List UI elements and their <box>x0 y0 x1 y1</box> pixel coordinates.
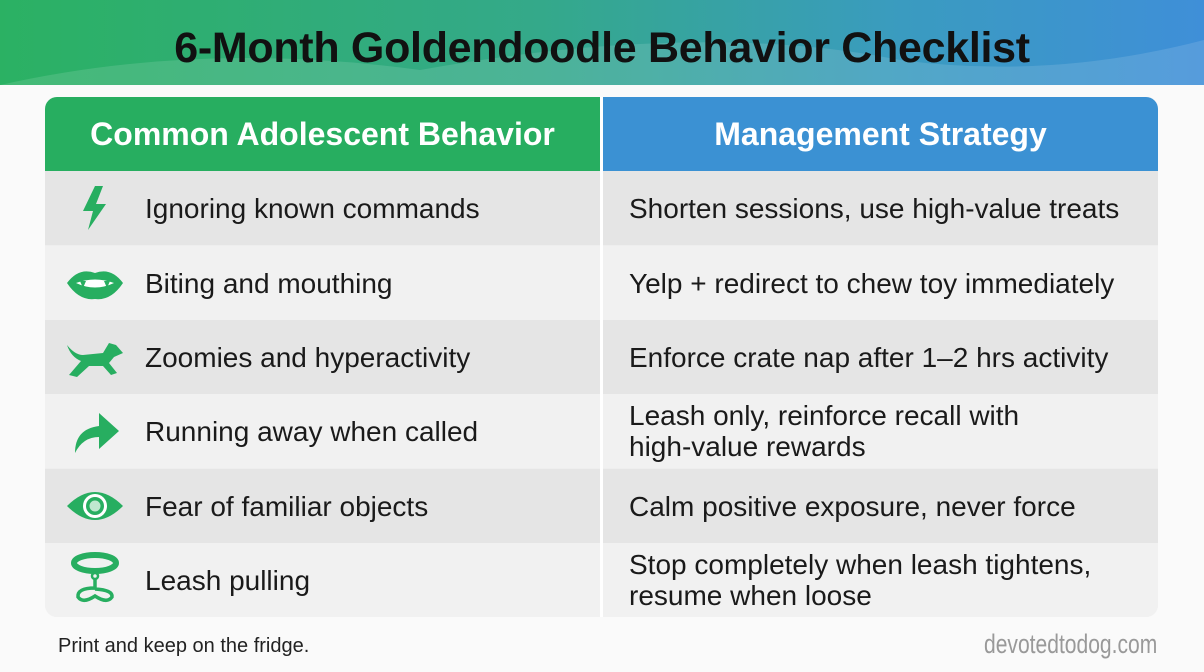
row 4: Running away when called <box>145 416 478 446</box>
row 6: Stop completely when leash tightens, <box>629 549 1091 580</box>
row 2 <box>45 246 1158 320</box>
icon: mouth <box>67 271 123 300</box>
icon: eye <box>67 492 123 520</box>
brand: devotedtodog.com <box>984 629 1157 659</box>
icon: collar and leash <box>71 552 119 602</box>
row 3 <box>45 320 1158 394</box>
row 5: Fear of familiar objects <box>145 490 428 522</box>
header: behavior: Common Adolescent Behavior <box>90 116 555 152</box>
row 4: high-value rewards <box>629 431 866 462</box>
row 1 <box>45 171 1158 245</box>
icon: arrow <box>75 413 119 453</box>
row 5 <box>45 469 1158 543</box>
row 2: Yelp + redirect to chew toy immediately <box>629 268 1114 298</box>
row 4: Leash only, reinforce recall with <box>629 400 1019 431</box>
row 2: Biting and mouthing <box>145 268 393 298</box>
table panel <box>45 97 1158 617</box>
footer note: Print and keep on the fridge. <box>58 635 309 657</box>
header: behavior <box>45 97 600 171</box>
row 1: Ignoring known commands <box>145 192 480 224</box>
row 6 <box>45 543 1158 617</box>
row 5: Calm positive exposure, never force <box>629 490 1076 522</box>
header: strategy <box>603 97 1158 171</box>
icon: running dog <box>67 343 123 377</box>
row 1: Shorten sessions, use high-value treats <box>629 192 1119 224</box>
row 3: Enforce crate nap after 1–2 hrs activity <box>629 342 1108 372</box>
row 3: Zoomies and hyperactivity <box>145 342 470 372</box>
header: strategy: Management Strategy <box>714 116 1047 152</box>
title: 6-Month Goldendoodle Behavior Checklist <box>174 24 1030 72</box>
header band <box>0 0 1204 85</box>
column divider <box>600 97 603 617</box>
row 6: Leash pulling <box>145 564 310 596</box>
icon: lightning <box>83 186 106 230</box>
row 6: resume when loose <box>629 580 872 611</box>
row 4 <box>45 394 1158 468</box>
